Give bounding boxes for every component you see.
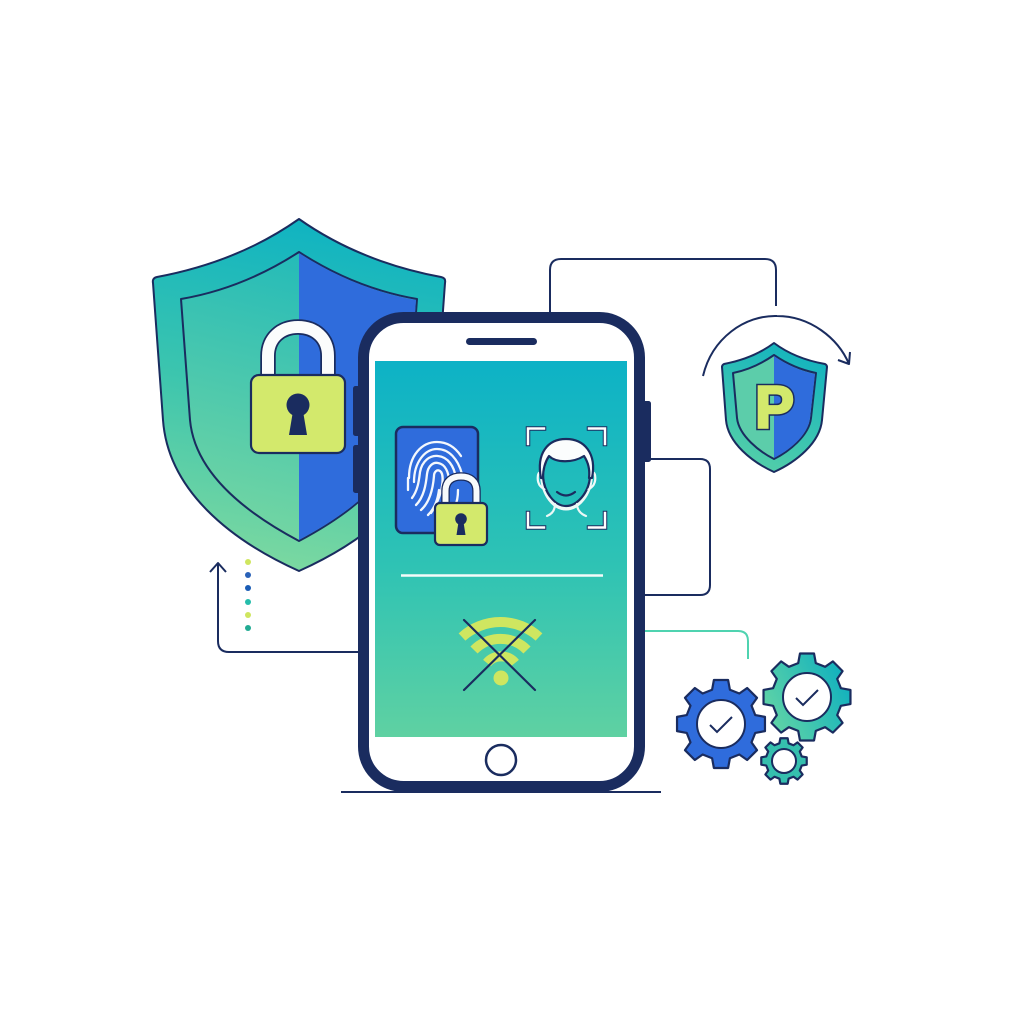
side buttons	[353, 386, 651, 493]
ears	[538, 472, 595, 490]
phone body	[364, 318, 640, 786]
padlock	[251, 327, 345, 453]
shield blue half	[299, 253, 416, 540]
smile	[557, 492, 575, 496]
small shield with P	[722, 343, 827, 472]
card	[396, 427, 478, 533]
fingerprint	[408, 442, 462, 515]
speaker	[466, 338, 537, 345]
connector right box	[645, 459, 710, 595]
small gear	[761, 738, 807, 784]
fingerprint card with lock	[396, 427, 487, 545]
jaw	[542, 476, 591, 508]
scan brackets	[528, 428, 605, 528]
small lock	[435, 476, 487, 545]
orbit arrow	[703, 316, 850, 376]
shield outer	[153, 219, 445, 571]
blue gear	[677, 680, 765, 768]
smartphone	[353, 318, 651, 786]
divider	[401, 574, 603, 577]
hair	[540, 439, 593, 478]
letter P outline and fill: P	[755, 374, 794, 440]
wifi crossed out	[462, 620, 539, 690]
neck	[547, 504, 586, 516]
connector teal to gears	[645, 631, 748, 659]
connector top to small shield	[550, 259, 776, 314]
shield inner	[181, 252, 417, 541]
face scan	[528, 428, 605, 528]
arrow left up	[210, 563, 358, 652]
large shield with padlock	[153, 219, 445, 571]
teal gear	[764, 654, 850, 740]
home button	[486, 745, 516, 775]
gears	[677, 654, 850, 784]
letter P outline and fill: P	[755, 374, 794, 440]
screen	[375, 361, 627, 737]
status dots	[245, 559, 251, 631]
ground line	[341, 791, 661, 793]
